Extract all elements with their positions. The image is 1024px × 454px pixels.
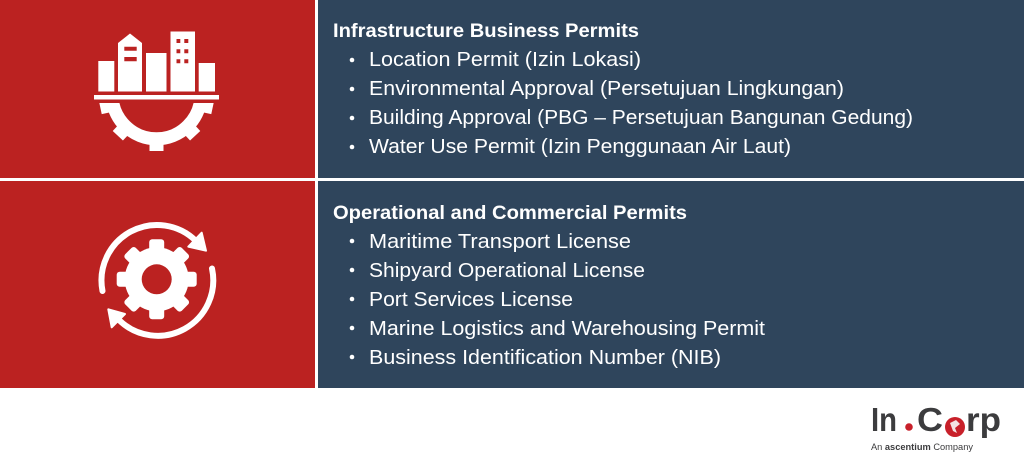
logo: InCorp xyxy=(871,401,1001,452)
heading: infrastructure business permits: Infrastructure Business Permits xyxy=(333,21,639,42)
list: infrastructure permits: Location Permit (Izin Lokasi) xyxy=(369,49,641,71)
list: operational permits: Port Services License xyxy=(369,289,573,311)
panel: infrastructure icon background xyxy=(0,0,315,178)
icon: gear with circular arrows xyxy=(101,225,213,336)
list: operational permits: Shipyard Operational License xyxy=(369,260,645,282)
panel: infrastructure permits background xyxy=(318,0,1024,178)
logo: InCorp: In xyxy=(871,401,897,438)
list: operational permits: Maritime Transport License xyxy=(369,231,631,253)
heading: operational and commercial permits: Operational and Commercial Permits xyxy=(333,203,687,224)
list: operational permits xyxy=(350,231,765,369)
list: infrastructure permits: Water Use Permit (Izin Penggunaan Air Laut) xyxy=(369,136,791,158)
list: infrastructure permits: Environmental Approval (Persetujuan Lingkungan) xyxy=(369,78,844,100)
logo: InCorp: C xyxy=(917,401,943,438)
icon: city buildings on gear xyxy=(94,32,219,151)
logo: InCorp: An ascentium Company xyxy=(871,442,974,452)
list: infrastructure permits: Building Approval (PBG – Persetujuan Bangunan Gedung) xyxy=(369,107,913,129)
list: infrastructure permits xyxy=(350,49,913,158)
logo: InCorp: rp xyxy=(966,401,1001,438)
panel: operational icon background xyxy=(0,181,315,388)
list: operational permits: Marine Logistics and Warehousing Permit xyxy=(369,318,765,340)
panel: operational permits background xyxy=(318,181,1024,388)
list: operational permits: Business Identification Number (NIB) xyxy=(369,347,721,369)
